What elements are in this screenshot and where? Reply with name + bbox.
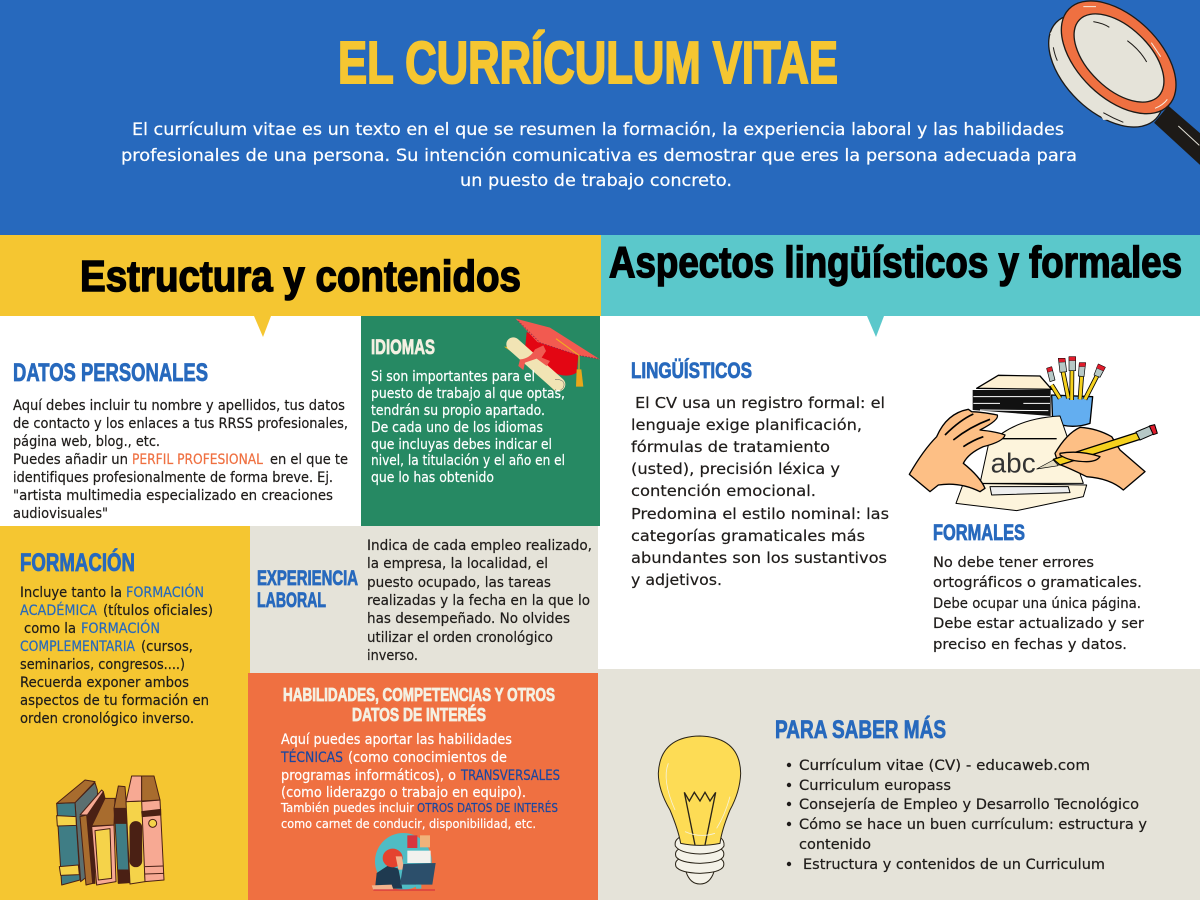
text: experiencia laboral: has desempeñado. No olvides [367,611,570,627]
text: datos personales [13,398,348,522]
text: datos personales: página web, blog., etc. [13,434,160,450]
text: experiencia laboral: la empresa, la localidad, el [367,556,548,572]
heading: lingüísticos: LINGÜÍSTICOS [631,358,752,383]
text: experiencia laboral: puesto ocupado, las tareas [367,575,551,591]
text: datos personales: PERFIL PROFESIONAL [132,452,263,468]
arrow: yellow pointer [254,316,271,337]
text: lingüísticos: El CV usa un registro formal: el [635,394,885,412]
panel: habilidades [248,673,598,900]
text: lingüísticos: y adjetivos. [631,571,722,589]
text: datos personales: "artista multimedia especializado en creaciones [13,488,333,504]
text: idiomas: nivel, la titulación y el año en el [371,453,565,469]
panel: linguisticos y formales [601,316,1200,669]
heading: datos personales: DATOS PERSONALES [13,359,208,387]
list: enlaces [787,758,1147,873]
heading: formales: FORMALES [933,520,1025,545]
text: lingüísticos: Predomina el estilo nominal: las [631,505,889,523]
panel: experiencia laboral [250,526,598,673]
text: habilidades [280,732,560,831]
text: habilidades: (como conocimientos de [348,750,507,766]
text: formación: (cursos, [141,639,193,655]
text: formación: ACADÉMICA [20,602,97,619]
text: experiencia laboral [367,538,592,664]
text: formales: ortográficos o gramaticales. [933,575,1142,591]
text: idiomas: De cada uno de los idiomas [371,420,543,436]
text: formación: aspectos de tu formación en [20,693,209,709]
heading: formación: FORMACIÓN [20,547,135,577]
intro text: profesionales de una persona. Su intención comunicativa es demostrar que eres la persona adecuada para [121,146,1077,166]
list: enlaces: Consejería de Empleo y Desarrollo Tecnológico [799,797,1139,813]
title: EL CURRÍCULUM VITAE [338,30,838,96]
text: lingüísticos: abundantes son los sustantivos [631,549,887,567]
list: enlaces: Curriculum europass [799,778,951,794]
text: idiomas: que incluyas debes indicar el [371,437,552,453]
text: formación: (títulos oficiales) [103,603,213,619]
text: formación: orden cronológico inverso. [20,711,194,727]
text: lingüísticos [631,394,889,589]
text: habilidades: Aquí puedes aportar las habilidades [281,732,512,748]
text: lingüísticos: lenguaje exige planificación, [631,416,862,434]
icon: magnifying glass [1028,0,1200,164]
text: habilidades: OTROS DATOS DE INTERÉS [417,800,558,815]
text: formales: Debe estar actualizado y ser [933,616,1144,632]
text: experiencia laboral: inverso. [367,648,418,664]
text: idiomas: puesto de trabajo al que optas, [371,386,565,402]
icon: hands writing abc [909,357,1157,511]
panel: estructura heading [0,235,601,337]
text: formación [20,583,213,727]
panel: formación [0,526,250,900]
heading: experiencia laboral: EXPERIENCIA [257,567,358,590]
icon: person at computer [372,833,436,890]
text: datos personales: de contacto y los enlaces a tus RRSS profesionales, [13,416,348,432]
icon: light bulb [658,736,741,884]
list: enlaces: contenido [799,837,871,853]
text: formación: Recuerda exponer ambos [20,675,189,691]
heading: habilidades: DATOS DE INTERÉS [352,704,486,725]
text: lingüísticos: fórmulas de tratamiento [631,438,830,456]
icon: graduation cap and diploma [504,319,600,391]
text: datos personales: audiovisuales" [13,506,108,522]
text: datos personales: Puedes añadir un [13,452,128,468]
intro text [121,120,1077,191]
heading: experiencia laboral [257,567,358,612]
text: formales [933,555,1144,653]
icon: hands writing abc: abc [991,448,1036,479]
text: experiencia laboral: Indica de cada empleo realizado, [367,538,592,554]
text: habilidades: como carnet de conducir, disponibilidad, etc. [281,817,536,831]
text: habilidades: También puedes incluir [280,801,414,815]
text: datos personales: en el que te [270,452,348,468]
heading: idiomas: IDIOMAS [371,336,435,359]
text: habilidades: programas informáticos), o [281,768,456,784]
text: habilidades: TÉCNICAS [280,749,343,766]
list: enlaces: Cómo se hace un buen currículum: estructura y [799,817,1147,833]
text: lingüísticos: contención emocional. [631,482,816,500]
heading: habilidades: HABILIDADES, COMPETENCIAS Y OTROS [283,685,555,705]
intro text: El currículum vitae es un texto en el que se resumen la formación, la experiencia laboral y las habilidades [132,120,1064,140]
panel: header [0,0,1200,235]
text: formales: preciso en fechas y datos. [933,637,1127,653]
text: datos personales: Aquí debes incluir tu nombre y apellidos, tus datos [13,398,345,414]
list: enlaces: Estructura y contenidos de un Curriculum [803,857,1105,873]
text: formación: COMPLEMENTARIA [20,639,135,655]
text: lingüísticos: categorías gramaticales más [631,527,865,545]
text: formación: Incluye tanto la [20,585,122,601]
text: experiencia laboral: realizadas y la fecha en la que lo [367,593,590,609]
panel: idiomas [361,316,600,526]
text: formación: como la [24,621,76,637]
text: habilidades: TRANSVERSALES [460,768,560,784]
text: idiomas: Si son importantes para el [371,369,535,385]
heading: estructura y contenidos: Estructura y contenidos [80,252,521,301]
text: lingüísticos: (usted), precisión léxica y [631,460,840,478]
text: formales: Debe ocupar una única página. [933,596,1141,612]
text: habilidades: (como liderazgo o trabajo en equipo). [281,785,526,801]
text: formales: No debe tener errores [933,555,1094,571]
arrow: teal pointer [867,316,884,337]
heading: habilidades [283,685,555,725]
text: experiencia laboral: utilizar el orden cronológico [367,630,553,646]
text: formación: FORMACIÓN [126,583,204,601]
intro text: un puesto de trabajo concreto. [460,171,732,191]
list: enlaces: Currículum vitae (CV) - educaweb.com [799,758,1090,774]
panel: para saber más [598,669,1200,900]
text: datos personales: identifiques profesionalmente de forma breve. Ej. [13,470,333,486]
text: idiomas: tendrán su propio apartado. [371,403,545,419]
heading: para saber más: PARA SABER MÁS [775,715,946,744]
text: formación: FORMACIÓN [81,619,160,637]
text: idiomas [371,369,565,486]
text: idiomas: que lo has obtenido [371,470,494,486]
panel: datos personales [0,316,361,526]
icon: books [57,776,164,885]
text: formación: seminarios, congresos....) [20,657,185,673]
heading: experiencia laboral: LABORAL [257,589,326,612]
panel: aspectos heading [601,235,1200,337]
